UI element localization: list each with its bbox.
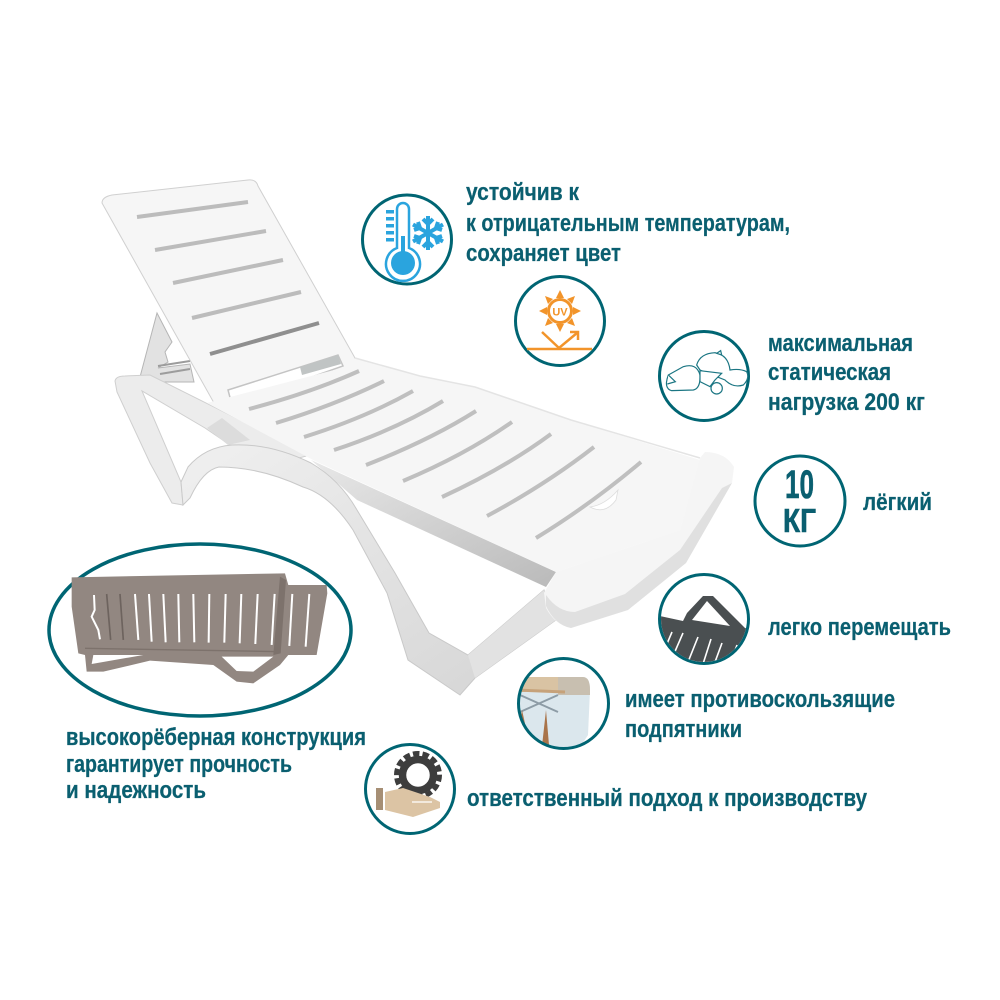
icon: UV sun xyxy=(516,276,604,366)
rear leg and arm xyxy=(115,375,310,505)
text: easy to move: легко перемещать xyxy=(768,614,951,641)
badge: 10 kg xyxy=(755,456,845,546)
seat surface xyxy=(207,358,700,572)
backrest slots xyxy=(137,202,319,354)
badge: 10 kg: КГ xyxy=(783,502,816,539)
oval frame xyxy=(49,544,351,716)
icon: carry handle xyxy=(658,573,750,665)
text: frost resistance: сохраняет цвет xyxy=(466,240,621,267)
icon: thermometer and snowflake xyxy=(362,195,452,284)
text: anti-slip feet: подпятники xyxy=(625,716,742,743)
text: anti-slip feet xyxy=(625,686,895,743)
caption: construction xyxy=(66,724,366,804)
seat side edge xyxy=(311,460,556,587)
text: frost resistance xyxy=(466,179,790,267)
text: static load: нагрузка 200 кг xyxy=(768,389,925,416)
text: frost resistance: устойчив к xyxy=(466,179,580,206)
text: anti-slip feet: имеет противоскользящие xyxy=(625,686,895,713)
seat top edge xyxy=(355,358,700,458)
caption: construction: гарантирует прочность xyxy=(66,751,292,778)
sun lounger illustration xyxy=(102,180,734,695)
backrest opening xyxy=(228,355,343,405)
adjustment mechanism xyxy=(140,313,194,382)
curved side frame xyxy=(181,445,556,695)
foot rest xyxy=(544,452,734,628)
icon: gear and hand xyxy=(366,744,454,834)
frame block under seat xyxy=(207,418,250,445)
underside photo xyxy=(72,573,327,683)
front leg shading xyxy=(468,590,556,678)
caption: construction: и надежность xyxy=(66,777,206,804)
backrest xyxy=(102,180,355,403)
text: light: лёгкий xyxy=(863,489,932,516)
seat cut-out xyxy=(590,490,618,510)
icon: anti-slip feet photo xyxy=(515,658,608,755)
badge: 10 kg: 10 xyxy=(785,463,814,507)
text: static load: статическая xyxy=(768,359,891,386)
text: frost resistance: к отрицательным температурам, xyxy=(466,210,790,237)
foot rest lower edge xyxy=(546,483,732,628)
text: static load: максимальная xyxy=(768,330,913,357)
icon: bear and dog load xyxy=(660,332,748,420)
panel: folded construction xyxy=(49,544,351,716)
text: static load xyxy=(768,330,925,416)
text: responsible production: ответственный подход к производству xyxy=(467,785,868,812)
seat slots xyxy=(249,371,641,538)
icon: UV sun: UV xyxy=(552,306,568,318)
caption: construction: высокорёберная конструкция xyxy=(66,724,366,751)
